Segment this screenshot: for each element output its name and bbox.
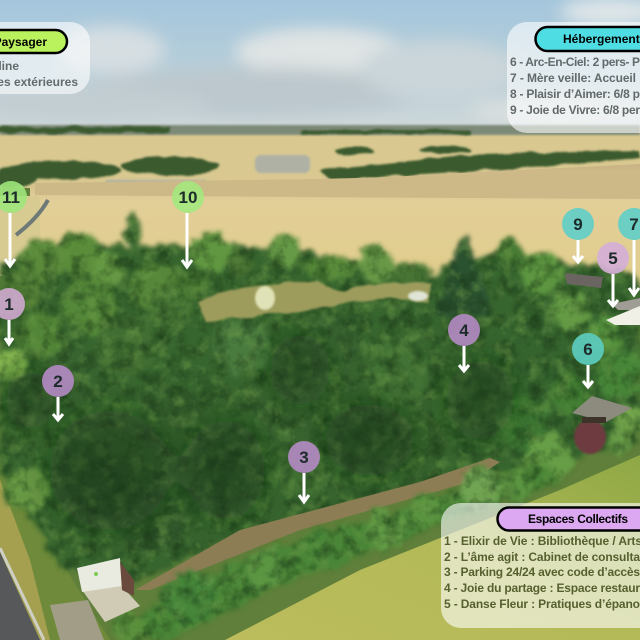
heading: paysager — [0, 30, 67, 53]
text: espaces collectifs list — [444, 534, 640, 611]
heading: espaces collectifs: Espaces Collectifs — [528, 512, 628, 526]
path beside the forest — [135, 458, 500, 590]
marker 7: 7 — [629, 215, 639, 234]
wheat field — [0, 164, 640, 290]
marker 5 — [597, 242, 629, 306]
marker 3 — [288, 441, 320, 502]
sky with clouds — [0, 0, 640, 130]
marker 10 — [172, 181, 204, 267]
marker 9 — [562, 208, 594, 262]
heading: hébergement — [536, 27, 640, 51]
text: hébergement list — [510, 55, 640, 117]
buildings — [565, 273, 640, 454]
marker 7 — [618, 208, 640, 295]
marker 4 — [448, 314, 480, 371]
marker 4: 4 — [459, 321, 469, 340]
road and verge — [0, 460, 110, 640]
bottom right meadow — [225, 455, 640, 640]
marker 3: 3 — [299, 448, 309, 467]
text: hébergement list: 9 - Joie de Vivre: 6/8 per — [510, 103, 640, 117]
marker 11: 11 — [2, 188, 20, 207]
text: hébergement list: 8 - Plaisir d’Aimer: 6/8 p — [510, 87, 640, 101]
text: espaces collectifs list: 1 - Elixir de Vie : Bibliothèque / Arts — [444, 534, 640, 548]
marker 6: 6 — [583, 340, 593, 359]
panel: espaces collectifs — [441, 503, 640, 628]
text: espaces collectifs list: 5 - Danse Fleur : Pratiques d’épano — [444, 597, 640, 611]
panel: aménagement paysager — [0, 22, 90, 94]
marker 6 — [572, 333, 604, 387]
text: espaces collectifs list: 3 - Parking 24/24 avec code d’accès — [444, 565, 640, 579]
text: hébergement list: 7 - Mère veille: Accueil — [510, 71, 636, 85]
text: hébergement list: 6 - Arc-En-Ciel: 2 pers- P — [510, 55, 640, 69]
marker 10: 10 — [179, 188, 197, 207]
text: espaces collectifs list: 4 - Joie du partage : Espace restaur — [444, 581, 640, 595]
marker 11 — [0, 181, 27, 266]
marker 1 — [0, 288, 25, 344]
forest mass — [0, 214, 640, 585]
pond — [198, 281, 432, 322]
text: paysager list — [0, 59, 78, 89]
hedge along the meadow — [112, 465, 560, 640]
marker 9: 9 — [573, 215, 583, 234]
forest shadows — [6, 334, 514, 530]
distant fields and horizon — [0, 125, 640, 188]
marker 5: 5 — [608, 249, 618, 268]
marker 2: 2 — [53, 372, 63, 391]
panel: hébergement — [507, 22, 640, 133]
heading: hébergement: Hébergement — [563, 32, 640, 46]
heading: espaces collectifs — [498, 508, 640, 530]
text: espaces collectifs list: 2 - L’âme agit : Cabinet de consulta — [444, 550, 640, 564]
marker 1: 1 — [4, 295, 14, 314]
parking entrance — [77, 558, 140, 622]
marker 2 — [42, 365, 74, 420]
